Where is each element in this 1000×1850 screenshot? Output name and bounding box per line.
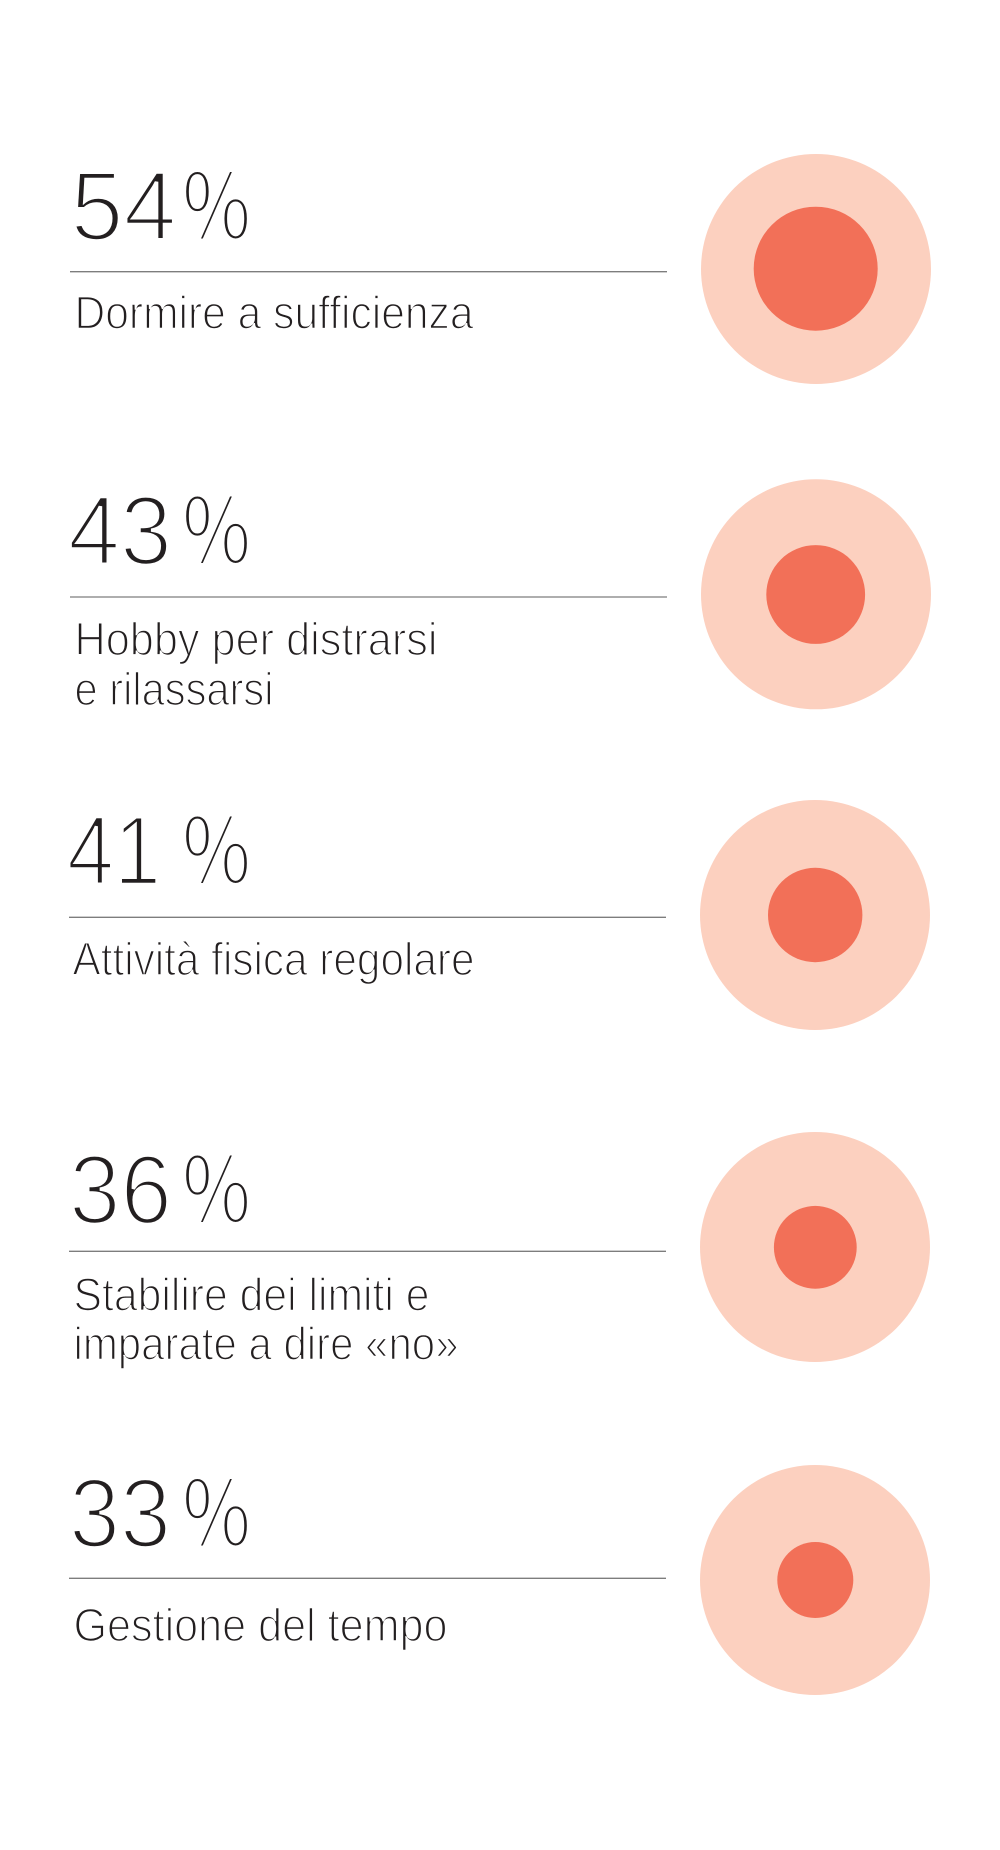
label: Hobby per distrarsi e rilassarsi: Hobby per distrarsi	[74, 613, 438, 665]
icon: concentric circles 54%	[701, 154, 931, 384]
divider line	[69, 916, 666, 918]
divider line	[69, 1250, 666, 1252]
label: Stabilire dei limiti e imparate a dire «no»: imparate a dire «no»	[74, 1317, 458, 1369]
label: Hobby per distrarsi e rilassarsi	[74, 613, 438, 715]
value: 54%: 54	[70, 151, 176, 261]
value: 43%: %	[182, 458, 251, 591]
row: 41% Attività fisica regolare	[67, 778, 930, 1030]
value: 54%: %	[182, 133, 251, 266]
icon: concentric circles 36%	[700, 1132, 930, 1362]
row: 33% Gestione del tempo	[69, 1440, 930, 1695]
value: 33%: 33	[69, 1458, 171, 1568]
value: 36%: 36	[69, 1135, 172, 1245]
divider line	[70, 596, 667, 598]
value: 41%: %	[182, 778, 251, 911]
label: Dormire a sufficienza: Dormire a sufficienza	[74, 286, 474, 338]
value: 54%	[70, 133, 251, 266]
value: 33%: %	[182, 1440, 251, 1573]
label: Stabilire dei limiti e imparate a dire «no»: Stabilire dei limiti e	[74, 1268, 430, 1320]
row: 36% Stabilire dei limiti e imparate a dire «no»	[69, 1117, 930, 1369]
value: 33%	[69, 1440, 251, 1573]
label: Hobby per distrarsi e rilassarsi: e rilassarsi	[74, 663, 274, 715]
value: 41%	[67, 778, 251, 911]
divider line	[70, 271, 667, 273]
label: Gestione del tempo: Gestione del tempo	[74, 1599, 448, 1651]
value: 43%	[68, 458, 251, 591]
label: Stabilire dei limiti e imparate a dire «no»	[74, 1268, 458, 1369]
row: 43% Hobby per distrarsi e rilassarsi	[68, 458, 931, 715]
label: Attività fisica regolare: Attività fisica regolare	[72, 933, 474, 985]
icon: concentric circles 41%	[700, 800, 930, 1030]
divider line	[69, 1577, 666, 1579]
icon: concentric circles 33%	[700, 1465, 930, 1695]
value: 43%: 43	[68, 476, 172, 586]
icon: concentric circles 43%	[701, 479, 931, 709]
row: 54% Dormire a sufficienza	[70, 133, 931, 384]
value: 36%	[69, 1117, 251, 1250]
value: 36%: %	[182, 1117, 251, 1250]
value: 41%: 41	[67, 796, 161, 906]
